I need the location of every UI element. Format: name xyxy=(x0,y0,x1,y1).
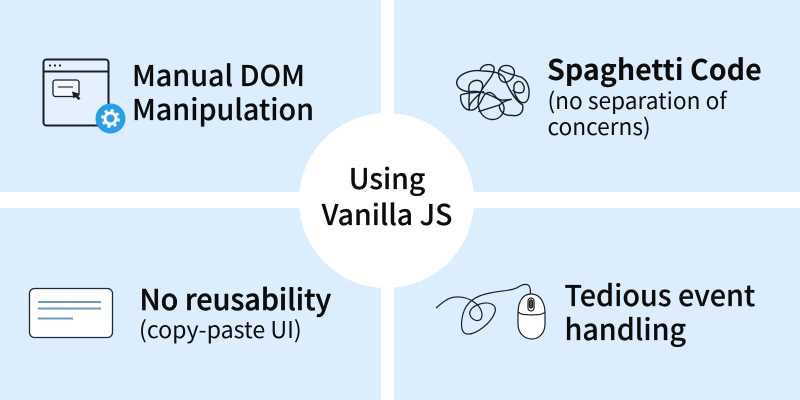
heading: no reusability: No reusability xyxy=(140,278,331,319)
panel: bottom right xyxy=(394,208,800,400)
subtext: copy-paste UI: (copy-paste UI) xyxy=(139,311,302,345)
heading: tedious event handling: Tedious event xyxy=(564,274,755,315)
center title: Using xyxy=(349,157,425,198)
subtext: no separation of concerns: concerns) xyxy=(548,108,651,142)
panel: top right xyxy=(394,0,800,192)
subtext: no separation of concerns xyxy=(548,83,728,142)
panel: top left xyxy=(0,0,381,192)
heading: tedious event handling xyxy=(564,274,755,348)
subtext: no separation of concerns: (no separation of xyxy=(548,83,727,116)
heading: tedious event handling: handling xyxy=(564,308,686,348)
center title xyxy=(322,157,452,234)
heading: manual DOM manipulation xyxy=(132,54,314,128)
heading: manual DOM manipulation: Manipulation xyxy=(132,88,314,128)
center title: Vanilla JS xyxy=(322,193,452,234)
center circle xyxy=(299,113,474,288)
panel: bottom left xyxy=(0,208,381,400)
heading: spaghetti code: Spaghetti Code xyxy=(547,48,762,89)
heading: manual DOM manipulation: Manual DOM xyxy=(132,54,305,95)
